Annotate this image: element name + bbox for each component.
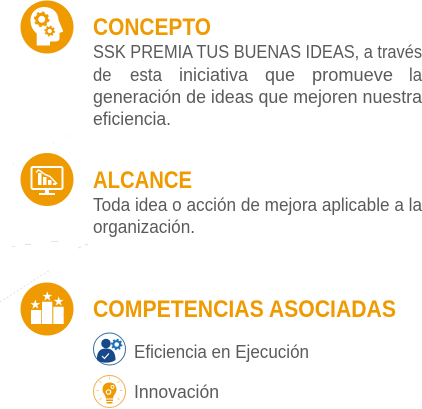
- heading: concepto: CONCEPTO: [93, 14, 211, 41]
- heading: alcance: ALCANCE: [93, 167, 192, 194]
- text block: concepto description: esta: [130, 64, 163, 85]
- text block: alcance description: [93, 194, 422, 237]
- icon: light bulb with gears: [94, 376, 126, 408]
- text block: concepto description: iniciativa: [179, 64, 249, 85]
- icon: podium with stars: [20, 282, 74, 336]
- icon: head with gears: [20, 0, 74, 54]
- competency: eficiencia en ejecución: [94, 333, 309, 365]
- text block: alcance description: organización.: [93, 216, 195, 237]
- text block: concepto description: eficiencia.: [93, 108, 171, 129]
- panel: concepto: [20, 0, 422, 129]
- text block: concepto description: que: [265, 64, 295, 85]
- competency: innovación: [94, 376, 219, 408]
- icon: person with gear: [94, 333, 126, 365]
- text block: concepto description: de: [93, 64, 112, 85]
- label: innovación: Innovación: [134, 381, 219, 402]
- text block: concepto description: promueve: [312, 64, 393, 85]
- icon: monitor with chart: [20, 153, 74, 206]
- panel: alcance: [20, 153, 422, 237]
- label: eficiencia en ejecución: Eficiencia en Ejecución: [134, 341, 309, 362]
- text block: concepto description: [93, 41, 422, 129]
- panel: competencias asociadas: [20, 282, 396, 408]
